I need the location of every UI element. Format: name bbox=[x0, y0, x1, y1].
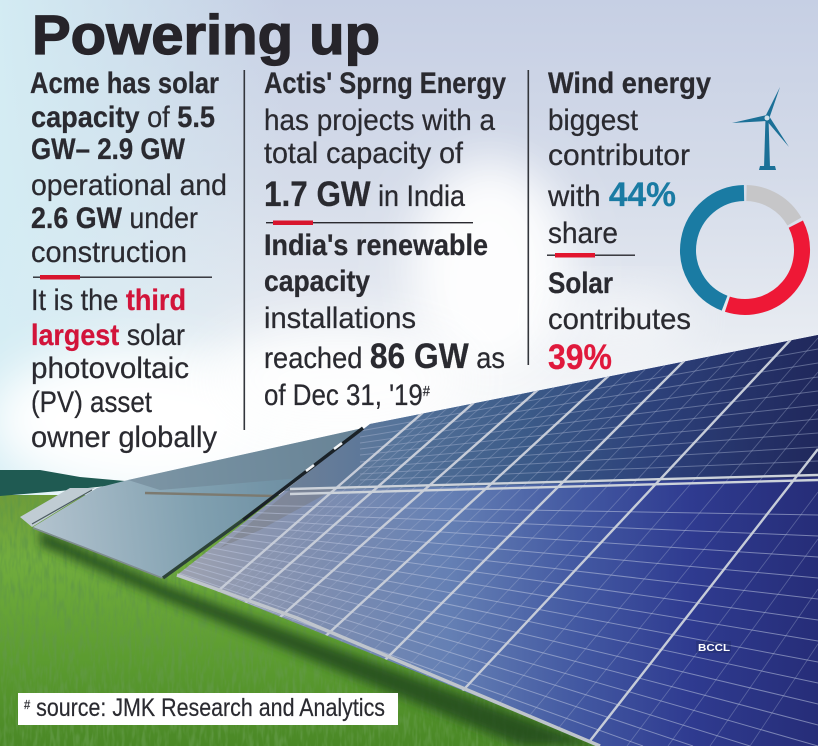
column 1: Acme: photovoltaic bbox=[31, 352, 189, 385]
cell rows, upper section bbox=[360, 349, 818, 480]
column 2: Actis and renewable capacity: # bbox=[423, 383, 431, 400]
column 1: Acme: GW– 2.9 GW bbox=[31, 133, 186, 166]
column 3: wind and solar: 39% bbox=[548, 338, 612, 377]
cross rail bbox=[290, 475, 818, 494]
panel bottom frame bbox=[177, 575, 600, 746]
column 2: Actis and renewable capacity: reached 86 GW as bbox=[264, 337, 505, 376]
column 3: wind and solar: Solar bbox=[548, 267, 613, 300]
solar share 39% bbox=[727, 224, 802, 307]
column 2: Actis and renewable capacity: installations bbox=[264, 302, 416, 335]
column 3: wind and solar: with 44% bbox=[547, 176, 676, 214]
icon: wind turbine bbox=[732, 87, 789, 170]
column 3: wind and solar bbox=[547, 67, 711, 377]
wind share 44% bbox=[688, 193, 744, 303]
rear solar panel bbox=[20, 428, 363, 578]
divider 1 bbox=[244, 70, 245, 430]
tree line bbox=[0, 470, 125, 496]
column 2: Actis and renewable capacity: Actis' Sprng Energy bbox=[264, 67, 506, 100]
title: Powering up bbox=[32, 3, 380, 66]
column 1: Acme: 2.6 GW under bbox=[31, 202, 198, 235]
column 1: Acme: Acme has solar bbox=[30, 67, 219, 100]
column 3: wind and solar: Wind energy bbox=[548, 67, 711, 100]
module dividers bbox=[216, 340, 818, 740]
divider 2 bbox=[528, 70, 529, 365]
column 1: Acme: owner globally bbox=[31, 421, 217, 454]
column 2: Actis and renewable capacity: of Dec 31, '19 bbox=[264, 379, 448, 412]
column 3: wind and solar: biggest bbox=[548, 104, 639, 137]
gap between panels bbox=[243, 428, 363, 520]
column 3: wind and solar: contributes bbox=[548, 303, 691, 336]
column 2: Actis and renewable capacity bbox=[264, 67, 506, 412]
cell rows, lower section bbox=[170, 504, 818, 746]
column 2: Actis and renewable capacity: has projects with a bbox=[264, 104, 495, 137]
source box: source: JMK Research and Analytics bbox=[30, 694, 385, 722]
column 2: Actis and renewable capacity: capacity bbox=[264, 265, 370, 298]
photo credit: BCCL bbox=[698, 642, 731, 654]
column 3: wind and solar: contributor bbox=[548, 139, 690, 172]
column 1: Acme: operational and bbox=[31, 169, 227, 202]
column 3: wind and solar: share bbox=[548, 217, 618, 250]
column 1: Acme: It is the third bbox=[31, 284, 186, 317]
column 2: Actis and renewable capacity: total capacity of bbox=[264, 137, 464, 170]
source box: # bbox=[24, 697, 31, 712]
sky background bbox=[0, 0, 818, 500]
column 1: Acme: construction bbox=[31, 236, 187, 269]
other share bbox=[746, 193, 794, 222]
column 1: Acme bbox=[30, 67, 227, 454]
grass field bbox=[0, 495, 596, 746]
donut chart bbox=[688, 193, 802, 307]
column 1: Acme: (PV) asset bbox=[31, 386, 153, 419]
cell columns bbox=[224, 338, 818, 746]
column 1: Acme: capacity of 5.5 bbox=[31, 101, 215, 134]
column 2: Actis and renewable capacity: India's renewable bbox=[264, 229, 488, 262]
front solar panel bbox=[162, 335, 818, 746]
column 2: Actis and renewable capacity: 1.7 GW in India bbox=[264, 175, 465, 214]
column 1: Acme: largest solar bbox=[31, 319, 185, 352]
